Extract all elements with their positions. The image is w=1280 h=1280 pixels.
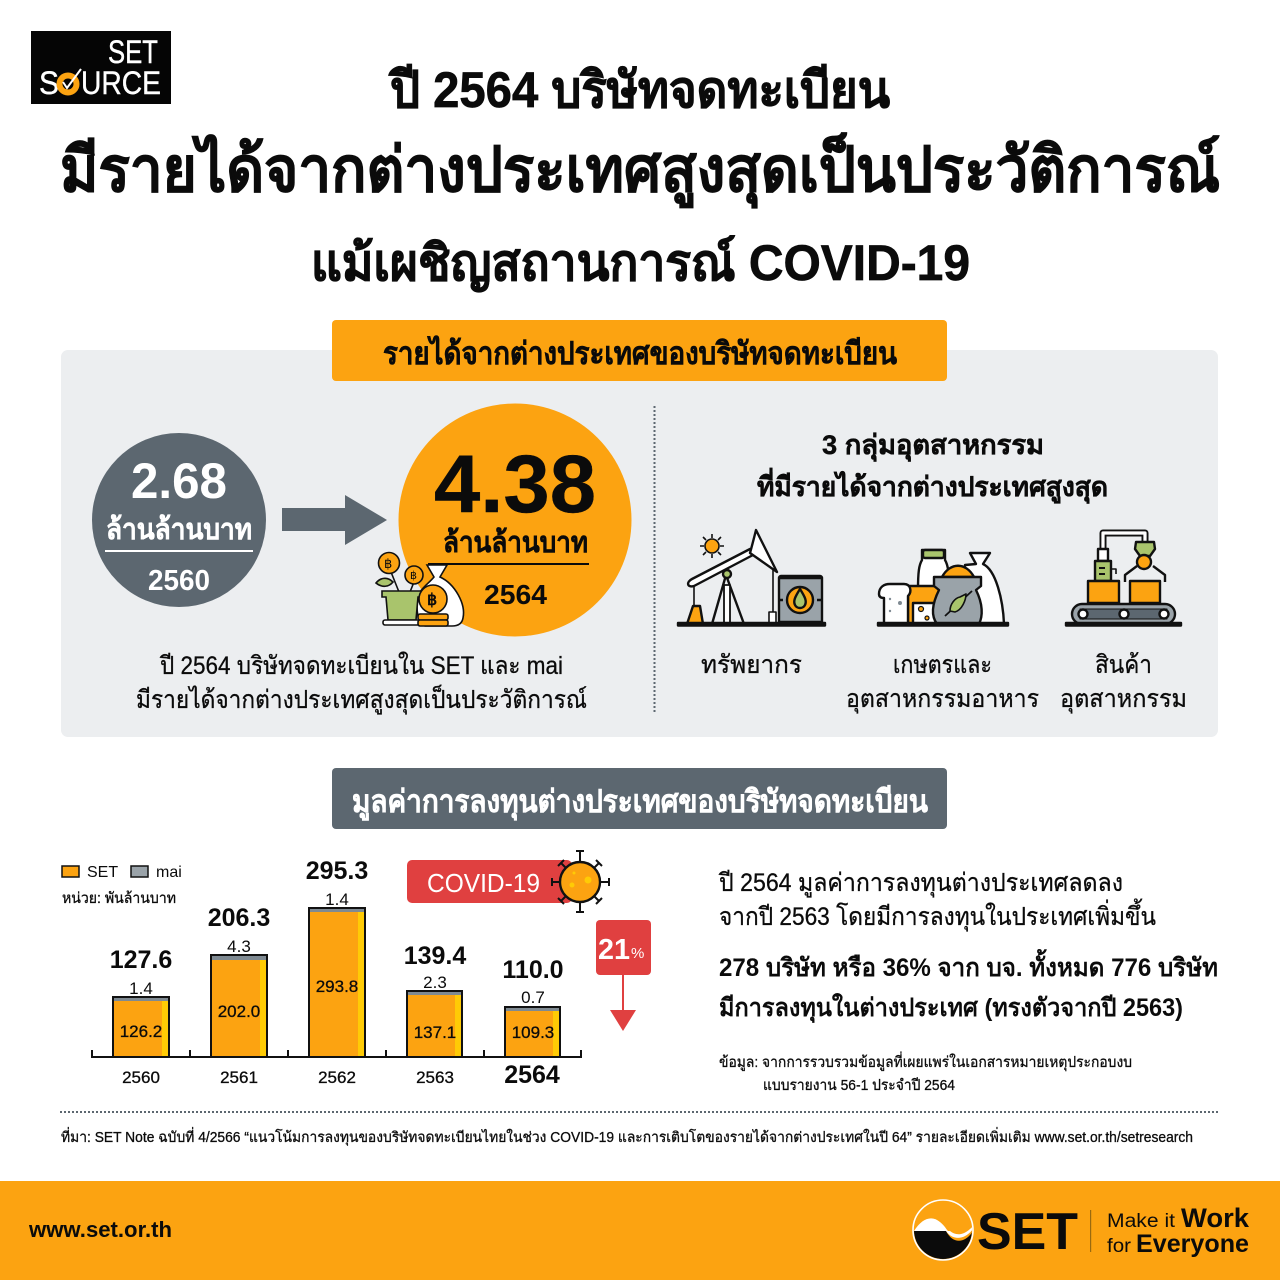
bar: 2560	[110, 946, 172, 1057]
note: data source: ข้อมูล: จากการรวบรวมข้อมูลที่เผยแพร่ในเอกสารหมายเหตุประกอบงบ	[719, 1051, 1132, 1072]
icon: oil pump and barrel	[678, 530, 825, 626]
axis labels: 2563	[416, 1068, 454, 1087]
panel: foreign revenue	[61, 320, 1218, 737]
bar: 2564: 109.3	[512, 1023, 554, 1042]
bar: 2560: 1.4	[129, 979, 153, 998]
circle: 2560 revenue: 2.68	[131, 453, 227, 509]
legend: หน่วย: พันล้านบาท	[62, 890, 176, 907]
arrow: growth	[282, 495, 387, 545]
bar chart	[92, 857, 581, 1089]
circle: 2560 revenue: 2560	[148, 565, 210, 597]
text: investment summary: 278 บริษัท หรือ 36% จาก บจ. ทั้งหมด 776 บริษัท	[719, 948, 1218, 982]
text: revenue summary	[136, 651, 587, 715]
circle: 2564 revenue	[398, 404, 632, 636]
logo: SET Source: URCE	[81, 65, 161, 101]
axis labels: 2562	[318, 1068, 356, 1087]
heading: top 3 industries: ที่มีรายได้จากต่างประเทศสูงสุด	[757, 467, 1108, 504]
heading: foreign revenue	[332, 320, 947, 381]
bar: 2564: 110.0	[502, 956, 564, 984]
bar: 2561: 206.3	[208, 904, 270, 932]
bar: 2562	[306, 857, 368, 1057]
title	[60, 62, 1220, 292]
legend	[62, 864, 182, 907]
icon: factory conveyor	[1066, 533, 1181, 626]
bar: 2560: 127.6	[110, 946, 172, 974]
text: source reference: ที่มา: SET Note ฉบับที่ 4/2566 “แนวโน้มการลงทุนของบริษัทจดทะเบียนไทยในช่วง COVID-19 และการเติบโตของรายได้จากต่างประเทศในปี 64” รายละเอียดเพิ่มเติม www.set.or.th/setresearch	[61, 1127, 1193, 1146]
axis labels: 2564	[504, 1061, 560, 1089]
bar: 2562: 295.3	[306, 857, 368, 885]
chart axis	[92, 1050, 581, 1057]
labels: industries: สินค้า	[1095, 651, 1152, 679]
circle: 2560 revenue: ล้านล้านบาท	[106, 514, 252, 546]
legend: mai	[156, 864, 182, 881]
text: investment summary	[718, 869, 1218, 1024]
bar: 2560: 126.2	[120, 1022, 162, 1041]
heading: foreign investment: มูลค่าการลงทุนต่างประเทศของบริษัทจดทะเบียน	[352, 784, 928, 821]
circle: 2560 revenue	[92, 433, 266, 607]
logo: SET Make it Work for Everyone	[913, 1200, 1250, 1261]
bar: 2561: 4.3	[227, 937, 251, 956]
note: data source: แบบรายงาน 56-1 ประจำปี 2564	[763, 1077, 955, 1094]
logo: SET Make it Work for Everyone: for	[1107, 1236, 1132, 1257]
logo: SET Make it Work for Everyone: Everyone	[1136, 1230, 1249, 1258]
bar: 2563	[404, 942, 466, 1057]
callout: 21% decrease	[596, 920, 651, 1031]
axis labels: 2561	[220, 1068, 258, 1087]
callout: 21% decrease: 21	[598, 934, 630, 966]
footer website: www.set.or.th	[28, 1217, 172, 1242]
bar: 2564: 0.7	[521, 988, 545, 1007]
bar: 2563: 139.4	[404, 942, 466, 970]
bar: 2562: 1.4	[325, 890, 349, 909]
labels: industries: อุตสาหกรรม	[1060, 685, 1187, 714]
axis labels: 2560	[122, 1068, 160, 1087]
heading: foreign investment	[332, 768, 947, 829]
labels: industries: เกษตรและ	[893, 651, 992, 679]
text: revenue summary: มีรายได้จากต่างประเทศสูงสุดเป็นประวัติการณ์	[136, 684, 587, 715]
bar: 2561: 202.0	[218, 1002, 260, 1021]
labels: industries: ทรัพยากร	[701, 651, 802, 679]
callout: COVID-19: COVID-19	[427, 868, 540, 898]
logo: SET Source: S	[39, 65, 59, 101]
title: แม้เผชิญสถานการณ์ COVID-19	[311, 235, 970, 292]
text: investment summary: มีการลงทุนในต่างประเทศ (ทรงตัวจากปี 2563)	[719, 992, 1183, 1024]
labels: industries: อุตสาหกรรมอาหาร	[846, 685, 1039, 714]
bar: 2563: 137.1	[414, 1023, 456, 1042]
icon: money bag and coin plant	[376, 552, 463, 626]
bar: 2563: 2.3	[423, 973, 447, 992]
heading: top 3 industries	[757, 430, 1108, 504]
circle: 2564 revenue: 4.38	[434, 439, 596, 530]
circle: 2564 revenue: ล้านล้านบาท	[443, 527, 588, 559]
footer band	[0, 1181, 1280, 1280]
heading: top 3 industries: 3 กลุ่มอุตสาหกรรม	[822, 430, 1044, 462]
labels: industries	[701, 651, 1187, 714]
text: investment summary: ปี 2564 มูลค่าการลงทุนต่างประเทศลดลง	[718, 869, 1123, 898]
heading: foreign revenue: รายได้จากต่างประเทศของบริษัทจดทะเบียน	[383, 335, 897, 371]
bar: 2564	[502, 956, 564, 1057]
callout: COVID-19	[407, 851, 609, 912]
logo: SET Make it Work for Everyone: SET	[977, 1203, 1078, 1261]
logo: SET Source	[31, 31, 171, 104]
axis labels	[122, 1061, 560, 1089]
logo: SET Make it Work for Everyone: Work	[1181, 1203, 1250, 1233]
circle: 2564 revenue: 2564	[484, 579, 547, 610]
bar: 2562: 293.8	[316, 977, 358, 996]
icon: money bag and coin plant: ฿	[427, 592, 437, 609]
title: ปี 2564 บริษัทจดทะเบียน	[388, 62, 890, 118]
icon: money bag and coin plant: ฿	[410, 570, 417, 582]
text: revenue summary: ปี 2564 บริษัทจดทะเบียนใน SET และ mai	[159, 651, 563, 680]
icon: food and agriculture	[878, 550, 1008, 626]
text: investment summary: จากปี 2563 โดยมีการลงทุนในประเทศเพิ่มขึ้น	[719, 898, 1156, 932]
title: มีรายได้จากต่างประเทศสูงสุดเป็นประวัติการณ์	[60, 132, 1220, 208]
icon: money bag and coin plant: ฿	[384, 556, 392, 571]
legend: SET	[87, 864, 118, 881]
callout: 21% decrease: %	[631, 945, 644, 962]
bar: 2561	[208, 904, 270, 1057]
logo: SET Source: SET	[108, 34, 158, 70]
note: data source	[719, 1051, 1132, 1094]
logo: SET Make it Work for Everyone: Make it	[1107, 1211, 1176, 1232]
